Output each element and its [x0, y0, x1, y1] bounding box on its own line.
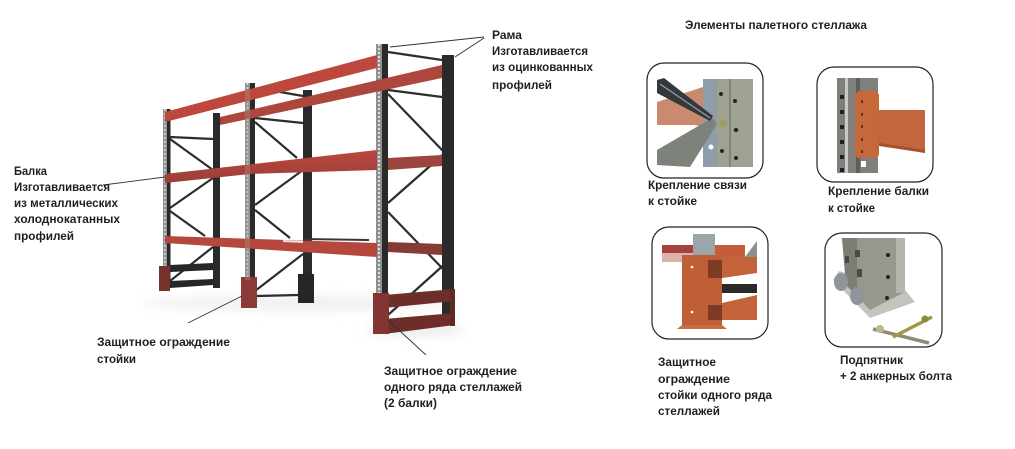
beams: [165, 55, 442, 280]
caption: row guard: ограждение: [658, 374, 730, 386]
callout: row guard: одного ряда стеллажей: [384, 382, 522, 394]
middle frame: [241, 83, 314, 308]
leader lines: [103, 37, 484, 355]
callout: frame: Изготавливается: [492, 46, 588, 58]
heading: Элементы палетного стеллажа: [685, 20, 868, 32]
callout: frame: профилей: [492, 80, 552, 92]
panel: base plate and anchor bolts: [825, 233, 942, 347]
callout: row guard: (2 балки): [384, 398, 437, 410]
caption: row guard: Защитное: [658, 357, 716, 369]
caption: base plate: Подпятник: [840, 355, 903, 367]
callout: beam: профилей: [14, 231, 74, 243]
caption: row guard: стойки одного ряда: [658, 390, 773, 402]
callout: frame: Рама: [492, 30, 523, 42]
caption: brace: к стойке: [648, 196, 697, 208]
panel: brace to upright: [647, 63, 763, 178]
callout: beam: холоднокатанных: [14, 214, 121, 226]
caption: brace: [648, 180, 747, 208]
callout: beam: из металлических: [14, 198, 119, 210]
caption: beam: [828, 186, 929, 215]
panel: beam to upright: [817, 67, 933, 182]
caption: row guard: [658, 357, 773, 418]
pallet rack illustration: [140, 44, 465, 336]
right frame: [376, 44, 454, 325]
left frame: [159, 109, 220, 291]
callout: frame: из оцинкованных: [492, 62, 594, 74]
caption: beam: к стойке: [828, 203, 875, 215]
callout: upright guard: Защитное ограждение: [97, 337, 230, 349]
callout: beam: [14, 166, 121, 243]
callout: row guard: Защитное ограждение: [384, 366, 517, 378]
front guard: [373, 289, 455, 334]
callout: frame: [492, 30, 594, 92]
callout: upright guard: стойки: [97, 354, 136, 366]
caption: row guard: стеллажей: [658, 406, 720, 418]
callout: beam: Изготавливается: [14, 182, 110, 194]
panel: row guard detail: [652, 227, 768, 339]
caption: beam: Крепление балки: [828, 186, 929, 198]
callout: upright guard: [97, 337, 230, 366]
callout: beam: Балка: [14, 166, 48, 178]
callout: row guard: [384, 366, 522, 410]
caption: brace: Крепление связи: [648, 180, 747, 192]
caption: base plate: + 2 анкерных болта: [840, 371, 953, 383]
caption: base plate: [840, 355, 953, 383]
